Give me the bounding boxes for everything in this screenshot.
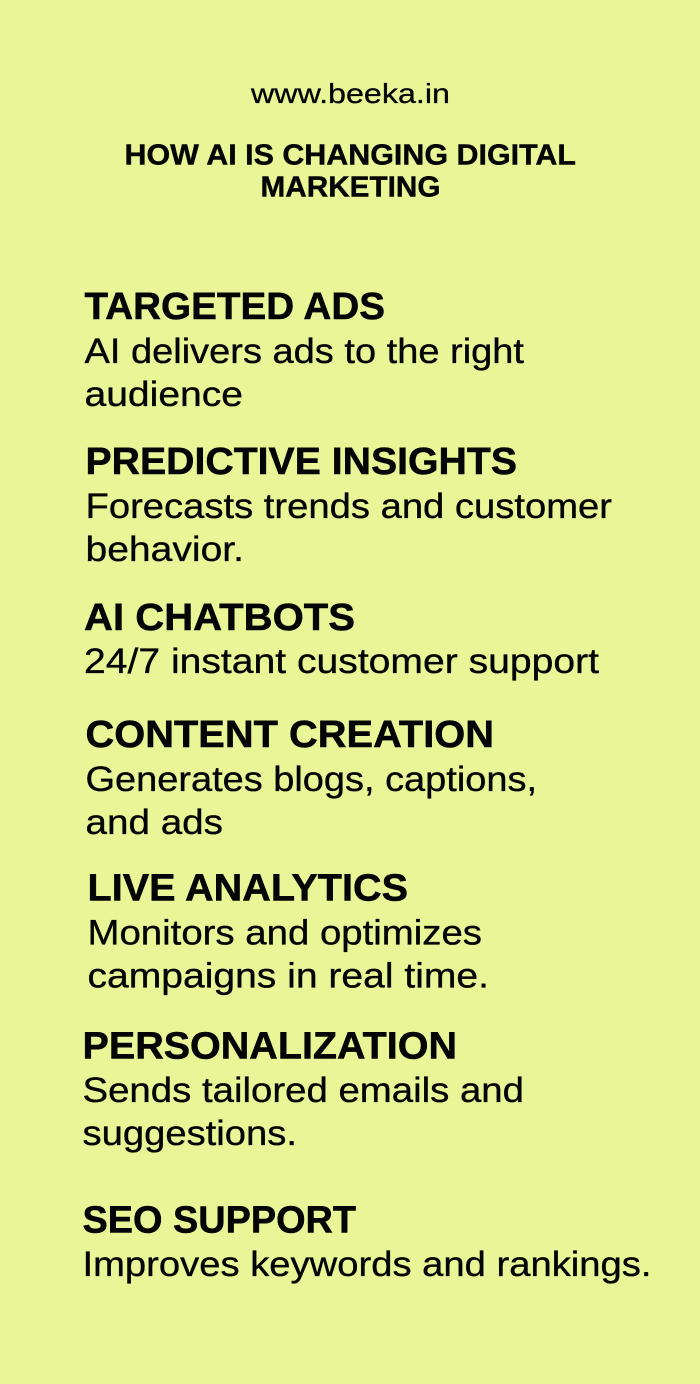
text: targeted ads description: [84, 332, 524, 414]
panel: seo support: [82, 1200, 652, 1284]
text: predictive insights description: Forecasts trends and customer: [86, 487, 612, 526]
text: personalization description: suggestions.: [82, 1114, 297, 1153]
title: MARKETING: [260, 172, 440, 204]
text: personalization description: [82, 1071, 524, 1153]
heading: ai chatbots: AI CHATBOTS: [84, 597, 355, 639]
text: seo support description: Improves keywords and rankings.: [82, 1245, 652, 1284]
text: predictive insights description: [86, 487, 612, 569]
heading: targeted ads: TARGETED ADS: [84, 286, 385, 328]
text: predictive insights description: behavior.: [86, 530, 244, 569]
text: targeted ads description: AI delivers ads to the right: [84, 332, 524, 371]
panel: content creation: [86, 714, 537, 842]
text: live analytics description: [88, 914, 489, 996]
panel: live analytics: [88, 868, 489, 996]
text: targeted ads description: audience: [84, 375, 243, 414]
title: [124, 140, 576, 204]
text: content creation description: and ads: [86, 803, 223, 842]
heading: seo support: SEO SUPPORT: [82, 1200, 356, 1242]
panel: targeted ads: [84, 286, 524, 414]
text: ai chatbots description: 24/7 instant customer support: [84, 642, 599, 681]
panel: predictive insights: [86, 441, 612, 569]
heading: personalization: PERSONALIZATION: [82, 1026, 457, 1068]
heading: live analytics: LIVE ANALYTICS: [88, 868, 408, 910]
title: HOW AI IS CHANGING DIGITAL: [124, 140, 576, 172]
text: content creation description: Generates blogs, captions,: [86, 760, 537, 799]
text: live analytics description: campaigns in real time.: [88, 956, 489, 996]
heading: content creation: CONTENT CREATION: [86, 714, 494, 756]
text: live analytics description: Monitors and optimizes: [88, 914, 482, 952]
text: content creation description: [86, 760, 537, 842]
heading: predictive insights: PREDICTIVE INSIGHTS: [86, 441, 517, 483]
website url: www.beeka.in: [250, 78, 450, 109]
panel: ai chatbots: [84, 597, 599, 681]
text: personalization description: Sends tailored emails and: [82, 1071, 524, 1110]
panel: personalization: [82, 1026, 524, 1153]
